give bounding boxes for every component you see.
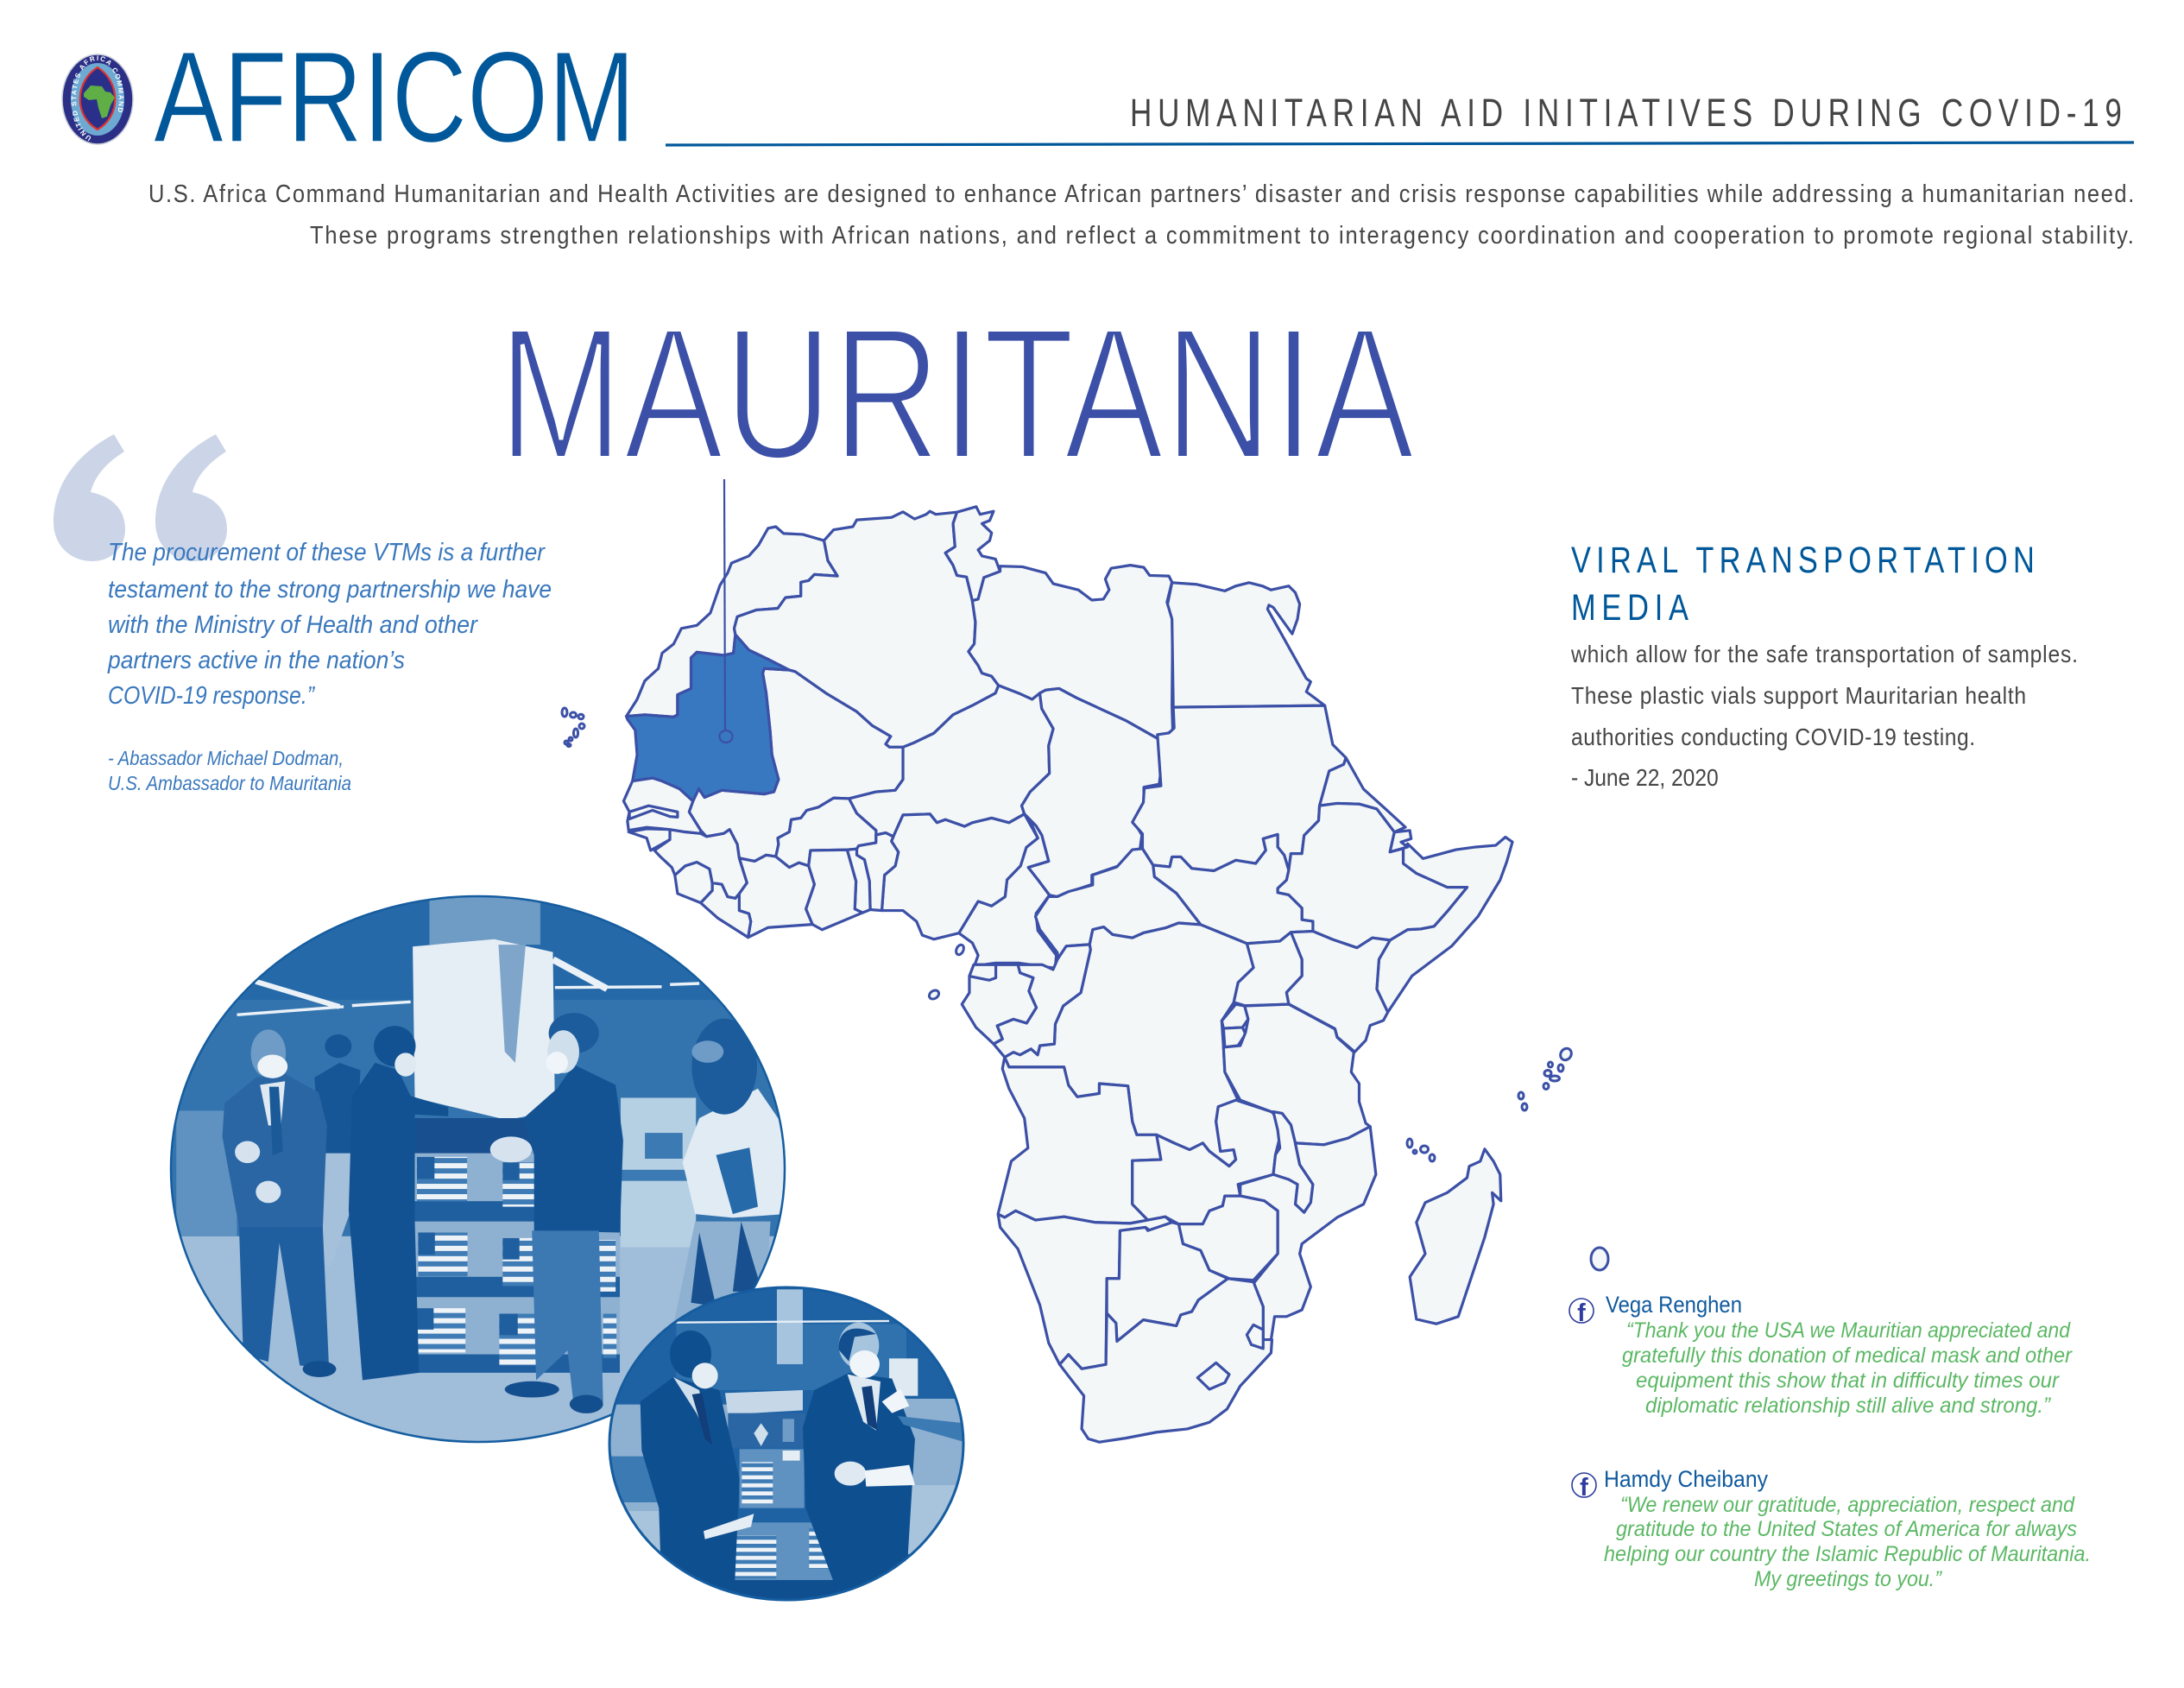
subtitle: Humanitarian aid initiatives: HUMANITARIAN AID INITIATIVES DURING COVID-19 <box>1130 91 2122 135</box>
official on the left <box>641 1377 740 1606</box>
truss <box>429 897 540 945</box>
comment: Hamdy Cheibany: gratitude to the United States of America for always <box>1616 1517 2077 1541</box>
bench and supplies <box>725 1390 803 1414</box>
background <box>616 1288 956 1556</box>
official on the right <box>803 1373 915 1591</box>
icon: Facebook, Vega Renghen <box>1569 1299 1594 1327</box>
ceiling lights <box>237 959 699 1015</box>
person at left <box>223 1074 327 1229</box>
comment: Hamdy Cheibany: Hamdy Cheibany <box>1604 1466 1768 1492</box>
quote text: testament to the strong partnership we have <box>108 576 552 604</box>
quote text: The procurement of these VTMs is a further <box>108 539 546 566</box>
flag cantons <box>417 1157 520 1335</box>
west and north Africa countries <box>623 507 1173 968</box>
photo: large circle, handover of supplies <box>172 897 784 1441</box>
photo: small circle, two officials <box>611 1288 962 1599</box>
title: AFRICOM: AFRICOM <box>154 24 635 169</box>
box stack <box>415 1147 620 1373</box>
white wrapped pallet <box>413 939 555 1120</box>
comment: Vega Renghen <box>1606 1292 2074 1418</box>
quote text: COVID-19 response.” <box>108 682 315 710</box>
body text: VTM description: authorities conducting COVID-19 testing. <box>1571 724 1975 750</box>
quote text: with the Ministry of Health and other <box>108 611 478 639</box>
person at right <box>524 1065 623 1232</box>
islands <box>562 708 1608 1270</box>
quote attribution: U.S. Ambassador to Mauritania <box>108 772 351 794</box>
comment: Hamdy Cheibany: “We renew our gratitude, appreciation, respect and <box>1620 1493 2075 1517</box>
quote attribution <box>108 747 351 794</box>
photo outline: small circle <box>609 1287 963 1600</box>
person in the middle <box>349 1063 448 1380</box>
table at right <box>621 1097 696 1248</box>
comment: Vega Renghen: gratefully this donation of medical mask and other <box>1622 1343 2074 1368</box>
body text: VTM description <box>1570 641 2078 791</box>
body text: VTM description: - June 22, 2020 <box>1571 764 1719 791</box>
comment: Hamdy Cheibany <box>1604 1466 2091 1591</box>
icon: Facebook, Hamdy Cheibany <box>1572 1473 1596 1501</box>
heading: Viral Transportation Media: MEDIA <box>1571 587 1688 629</box>
icon: AFRICOM seal: UNITED STATES AFRICA COMMAND <box>71 55 124 142</box>
photo outline: large circle <box>171 896 785 1442</box>
comment: Hamdy Cheibany: My greetings to you.” <box>1754 1567 1943 1591</box>
map pointer to Mauritania <box>720 479 732 743</box>
flags <box>417 1157 467 1201</box>
quote attribution: - Abassador Michael Dodman, <box>108 747 344 769</box>
comment: Vega Renghen: “Thank you the USA we Mauritian appreciated and <box>1626 1318 2071 1343</box>
highlighted country: Mauritania <box>627 635 789 801</box>
map of Africa <box>623 507 1512 1442</box>
body text: VTM description: These plastic vials support Mauritarian health <box>1571 682 2026 709</box>
body text: VTM description: which allow for the safe transportation of samples. <box>1570 641 2078 667</box>
heading: Mauritania: MAURITANIA <box>498 289 1415 499</box>
heading: Viral Transportation Media: VIRAL TRANSPORTATION <box>1571 540 2035 581</box>
person at back <box>314 1063 361 1155</box>
heading: Viral Transportation Media <box>1571 540 2035 629</box>
woman at right <box>674 1222 771 1321</box>
icon: quotation marks <box>54 434 227 561</box>
header rule <box>666 142 2134 145</box>
icon: Facebook, Vega Renghen: f <box>1577 1299 1586 1327</box>
comment: Hamdy Cheibany: helping our country the Islamic Republic of Mauritania. <box>1604 1542 2091 1566</box>
intro text: U.S. Africa Command Humanitarian and Health Activities are designed to enhance African partners’ disaster and crisis response capabilities while addressing a humanitarian need. <box>148 179 2134 207</box>
intro text <box>148 179 2134 249</box>
icon: Facebook, Hamdy Cheibany: f <box>1580 1474 1588 1501</box>
comment: Vega Renghen: equipment this show that in difficulty times our <box>1636 1369 2061 1393</box>
quote text: partners active in the nation’s <box>107 647 405 674</box>
comment: Vega Renghen: diplomatic relationship still alive and strong.” <box>1645 1394 2052 1418</box>
north-east Africa countries <box>1035 583 1512 1052</box>
central and southern Africa countries <box>962 923 1501 1442</box>
intro text: These programs strengthen relationships with African nations, and reflect a commitment to interagency coordination and cooperation to promote regional stability. <box>310 220 2134 249</box>
comment: Vega Renghen: Vega Renghen <box>1606 1292 1742 1318</box>
quote text <box>107 539 552 710</box>
room background <box>172 901 717 1179</box>
